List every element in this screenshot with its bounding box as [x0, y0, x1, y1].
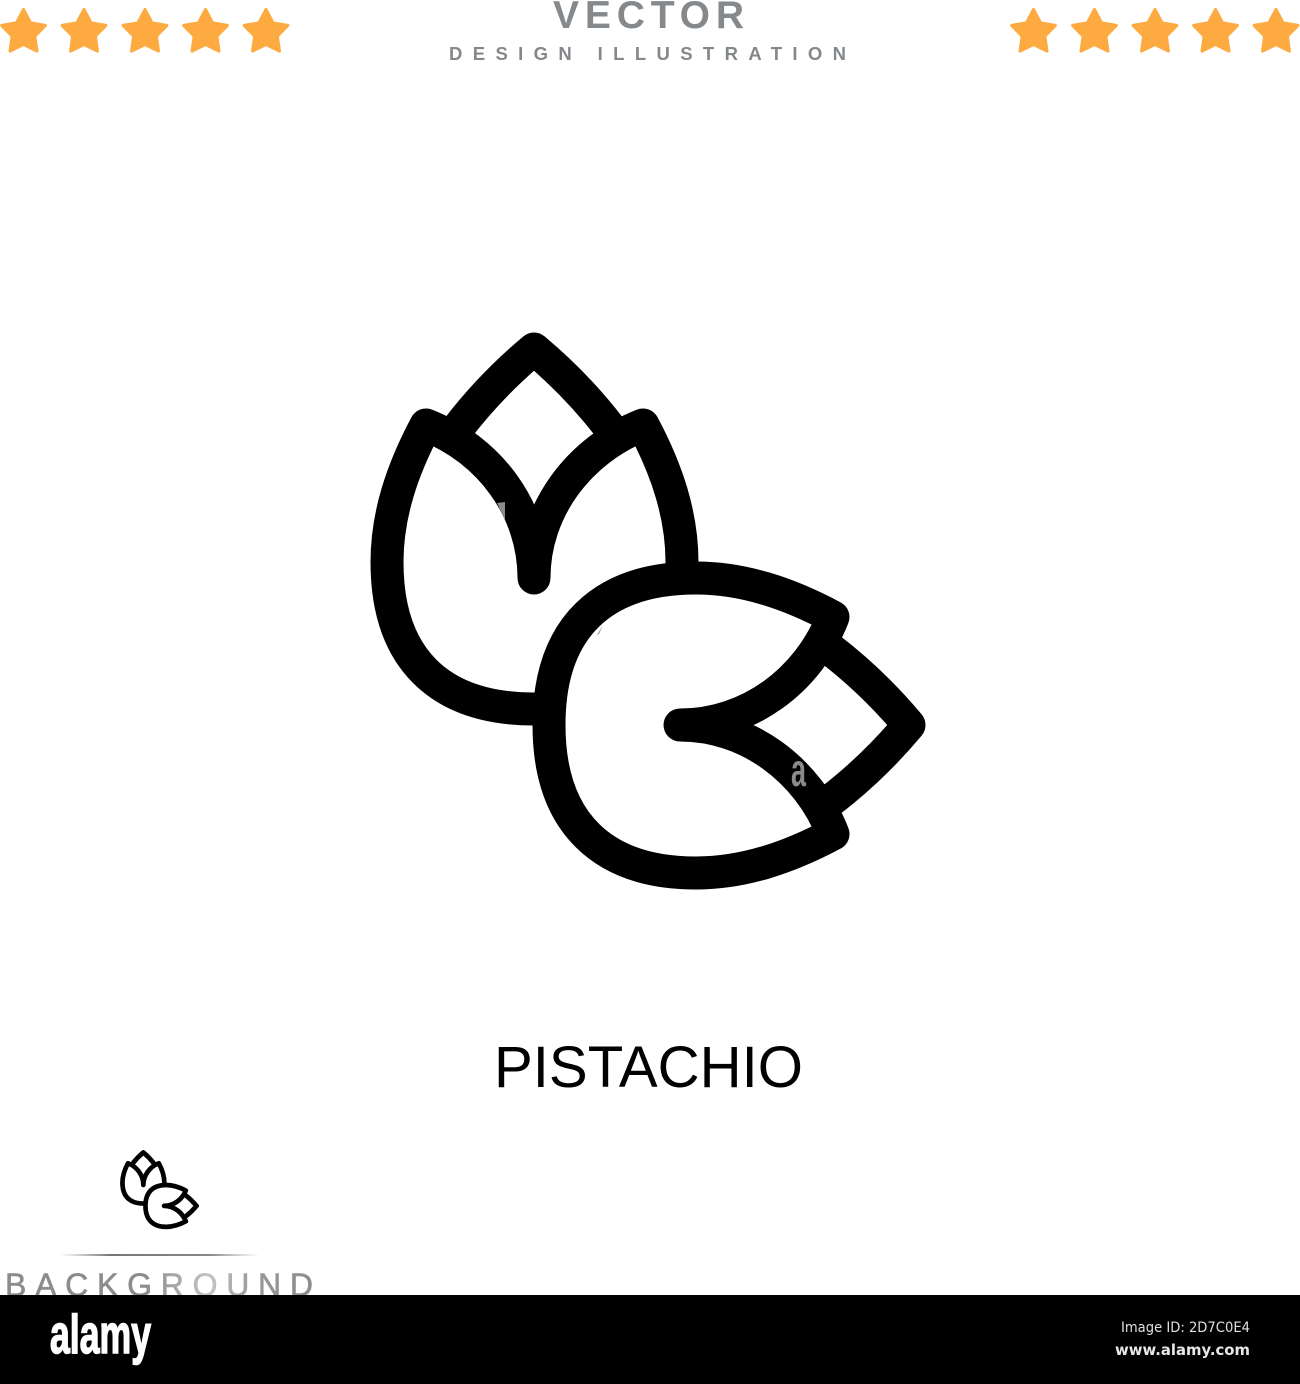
icon: large pistachio pair	[387, 349, 909, 873]
image id: Image ID: 2D7C0E4	[1121, 1320, 1250, 1336]
footer bar	[0, 1295, 1300, 1384]
subheading: DESIGN ILLUSTRATION: DESIGN ILLUSTRATION	[449, 43, 846, 64]
divider line above BACKGROUND	[60, 1254, 260, 1256]
watermark fragments	[497, 502, 806, 796]
right pistachio	[549, 578, 909, 873]
watermark fragments: a	[791, 744, 806, 796]
icon: right five star rating	[1012, 10, 1298, 51]
icon: left five star rating	[2, 10, 288, 51]
icon: small pistachio logo	[122, 1152, 197, 1227]
left pistachio	[387, 349, 682, 709]
website: www.alamy.com	[1115, 1341, 1250, 1359]
title: PISTACHIO: PISTACHIO	[494, 1035, 803, 1100]
text: BACKGROUND: BACKGROUND	[5, 1267, 313, 1303]
alamy logo: alamy	[50, 1303, 151, 1365]
